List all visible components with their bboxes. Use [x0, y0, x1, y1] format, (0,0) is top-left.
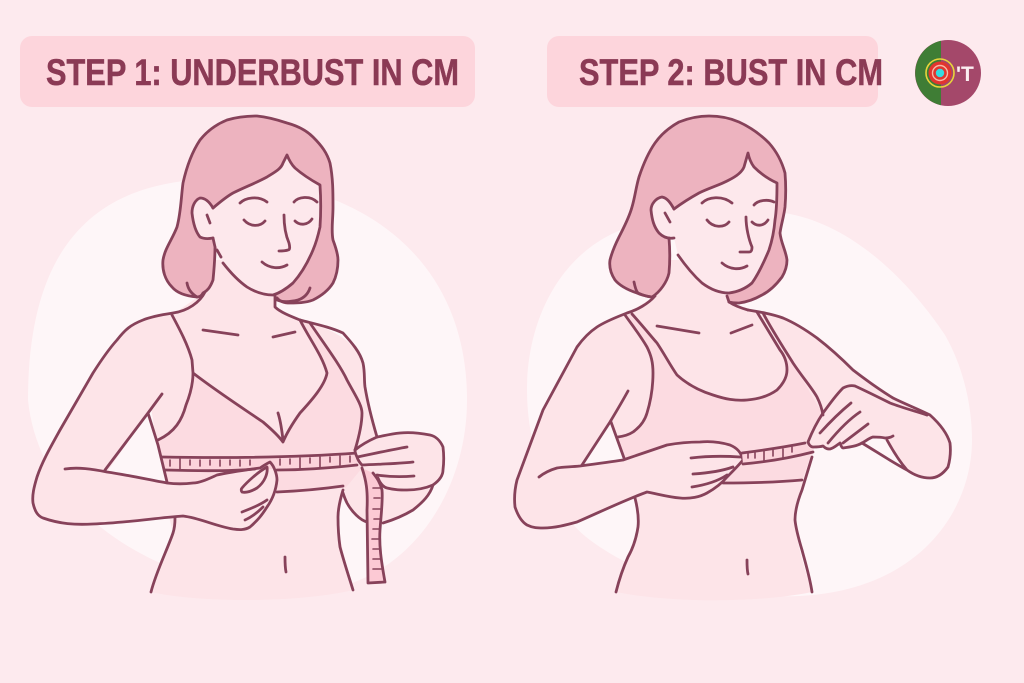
- background blob: step 2: [527, 211, 972, 596]
- torso skin: [150, 260, 377, 600]
- hair and face: [610, 116, 787, 303]
- left arm: [33, 292, 277, 530]
- body outlines: [618, 312, 823, 437]
- arm cutout: [582, 422, 624, 465]
- icon: round logo: [915, 40, 981, 106]
- right arm and hand: [748, 310, 950, 478]
- bra: [618, 312, 823, 483]
- arm cutout: [105, 413, 167, 483]
- icon: round logo: 'T: [956, 63, 974, 86]
- panel: step 1 heading: [20, 36, 475, 107]
- panel: step 2 heading: STEP 2: BUST IN CM: [579, 52, 883, 93]
- left arm and hand: [515, 296, 743, 528]
- bra: [158, 320, 364, 492]
- figure: woman measuring bust: [515, 116, 950, 600]
- panel: step 2 heading: [547, 36, 883, 107]
- torso skin: [610, 260, 823, 600]
- panel: step 1 heading: STEP 1: UNDERBUST IN CM: [46, 52, 459, 93]
- figure: woman measuring underbust: [33, 116, 444, 600]
- body outlines: [33, 292, 277, 530]
- tape measure at bust: [723, 443, 813, 483]
- right hand and forearm: [343, 433, 444, 524]
- tape measure around underbust: [162, 453, 357, 492]
- background blob: step 1: [28, 179, 467, 592]
- hair and face: [163, 116, 338, 303]
- hanging tape end: [362, 468, 385, 583]
